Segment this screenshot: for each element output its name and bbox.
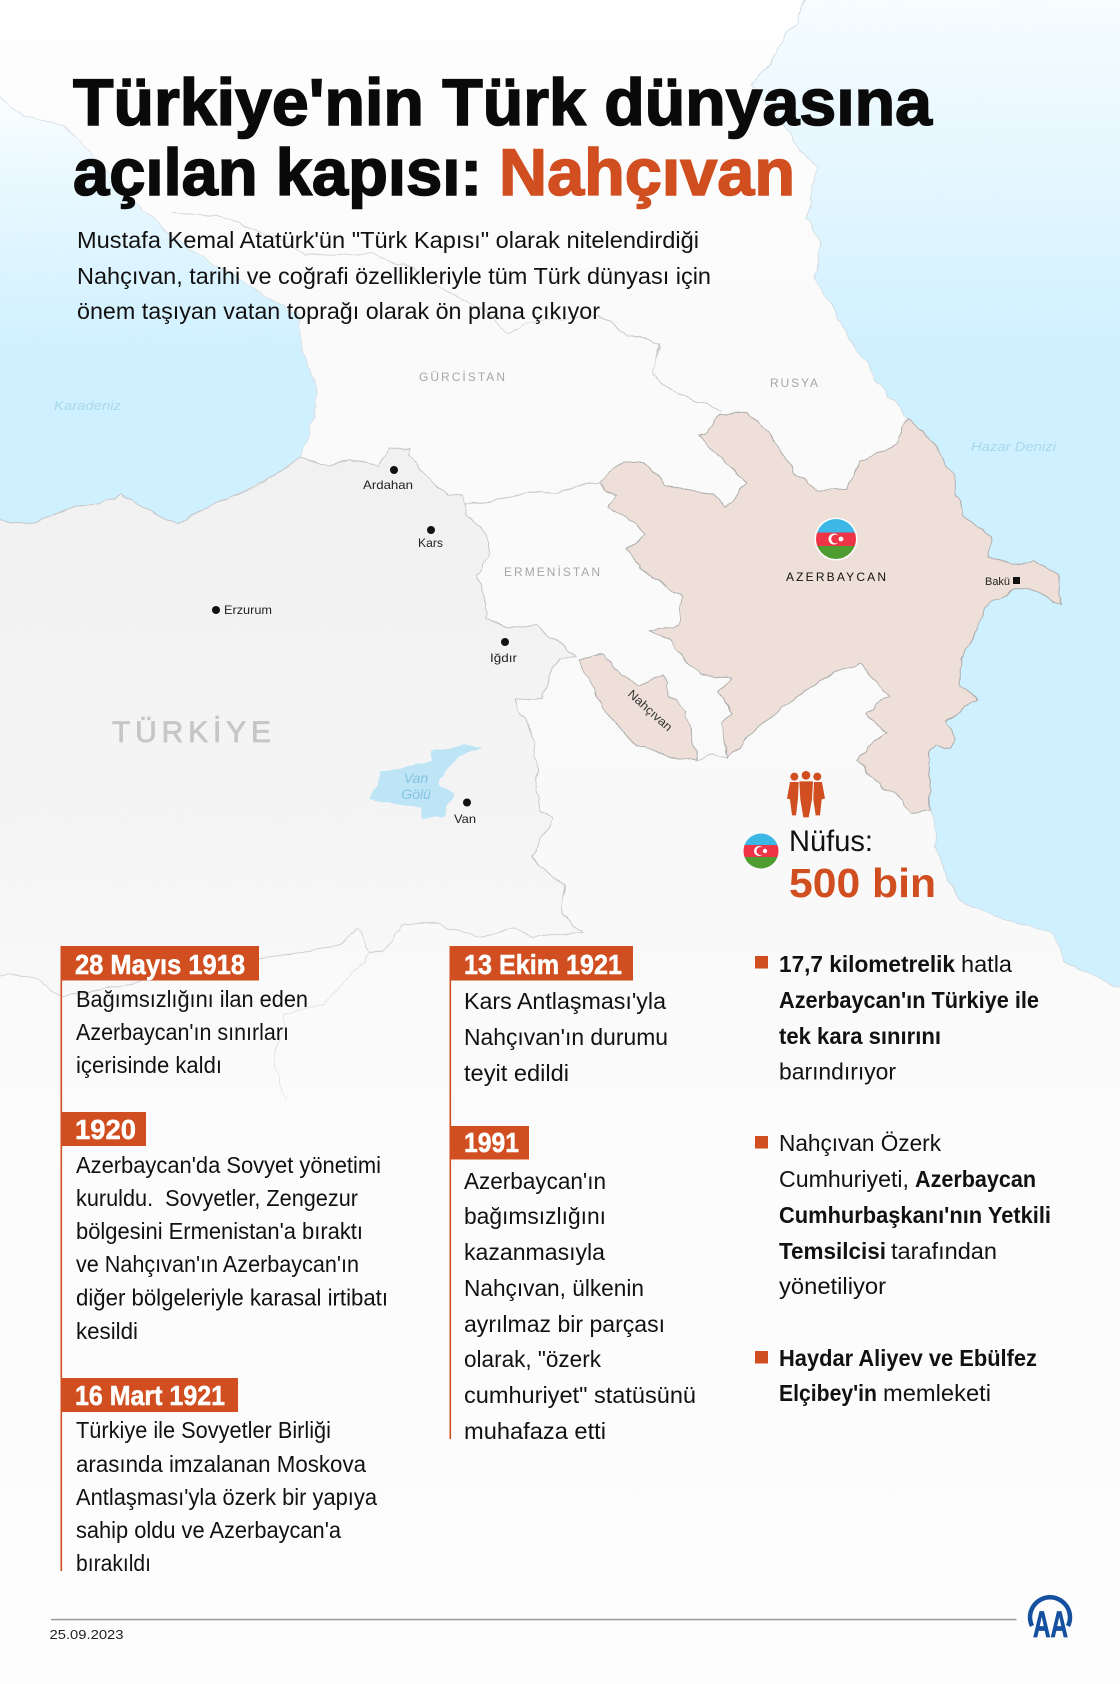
date: 13 Ekim 1921: 13 Ekim 1921 [464,949,622,980]
map of the Caucasus [0,0,1120,1100]
fact: administration: Nahçıvan Özerk [779,1130,941,1156]
timeline column 2 [450,946,696,1444]
map label: Van Gölü: Gölü [401,786,431,802]
population value: 500 bin [789,860,936,906]
borders [0,213,729,1100]
date: 1920 [61,1112,146,1146]
map label: Gürcistan: GÜRCİSTAN [419,370,505,384]
text: 16 Mart 1921 [76,1417,377,1576]
text: 1920: bölgesini Ermenistan'a bıraktı [76,1218,363,1244]
fact: administration: tarafından [891,1238,997,1264]
fact: administration: Temsilcisi [779,1238,886,1264]
country: Türkiye [0,448,582,997]
text: 1991: muhafaza etti [464,1418,606,1444]
subtitle: Nahçıvan, tarihi ve coğrafi özellikleriyle tüm Türk dünyası için [77,263,711,289]
fact: administration: Cumhurbaşkanı'nın Yetkili [779,1202,1051,1228]
fact: border: hatla [961,951,1012,977]
city: Kars: Kars [418,536,443,550]
title [73,65,933,209]
text: 1920: Azerbaycan'da Sovyet yönetimi [76,1152,381,1178]
fact: administration: yönetiliyor [779,1273,886,1299]
subtitle [77,227,711,324]
fact: leaders [755,1345,1037,1406]
region: Nahçıvan [577,654,696,761]
fact: leaders: Elçibey'in [779,1380,877,1406]
title: açılan kapısı: [73,135,482,209]
facts column [755,951,1051,1406]
text: 1991: ayrılmaz bir parçası [464,1311,665,1337]
fact: border: 17,7 kilometrelik [779,951,955,977]
date: 16 Mart 1921: 16 Mart 1921 [75,1380,225,1411]
text: 28 Mayıs 1918: içerisinde kaldı [76,1052,222,1078]
text: 1991: kazanmasıyla [464,1239,605,1265]
fact: border: barındırıyor [779,1058,896,1084]
text: 28 Mayıs 1918 [76,986,308,1078]
country: Azerbaycan [599,413,1062,813]
text: 1920: diğer bölgeleriyle karasal irtibatı [76,1284,388,1310]
text: 1920 [76,1152,388,1344]
date: 1991: 1991 [464,1127,519,1158]
text: 1991: Azerbaycan'ın [464,1168,606,1194]
subtitle: Mustafa Kemal Atatürk'ün "Türk Kapısı" olarak nitelendirdiği [77,227,699,253]
text: 1991: olarak, "özerk [464,1346,601,1372]
text: 16 Mart 1921: Türkiye ile Sovyetler Birliği [76,1417,331,1443]
map label: Ermenistan: ERMENİSTAN [504,565,600,579]
logo: AA [1030,1597,1070,1645]
city: Iğdır: Iğdır [490,651,517,665]
map label: Van Gölü: Van [404,770,428,786]
fact: administration: Cumhuriyeti, [779,1166,909,1192]
title: Türkiye'nin Türk dünyasına [73,65,933,139]
text: 28 Mayıs 1918: Azerbaycan'ın sınırları [76,1019,289,1045]
city: Van: Van [454,812,476,826]
fact: administration [755,1130,1051,1299]
date: 28 Mayıs 1918: 28 Mayıs 1918 [75,949,245,980]
title: Nahçıvan [499,135,795,209]
fact: border: Azerbaycan'ın Türkiye ile [779,987,1039,1013]
text: 13 Ekim 1921: Kars Antlaşması'yla [464,988,666,1014]
lake: Van Gölü [368,745,482,818]
border of Türkiye, north and east [0,448,582,933]
text: 16 Mart 1921: sahip oldu ve Azerbaycan'a [76,1517,341,1543]
date: 1920: 1920 [75,1114,136,1145]
date: 25.09.2023 [50,1627,124,1642]
text: 16 Mart 1921: Antlaşması'yla özerk bir yapıya [76,1484,377,1510]
text: 13 Ekim 1921: Nahçıvan'ın durumu [464,1024,668,1050]
city: Bakü: Bakü [985,576,1010,588]
text: 1920: kesildi [76,1318,138,1344]
city: Van [454,798,476,826]
timeline column 1 [60,946,388,1576]
text: 1991: Nahçıvan, ülkenin [464,1275,644,1301]
text: 28 Mayıs 1918: Bağımsızlığını ilan eden [76,986,308,1012]
fact: administration: Azerbaycan [915,1166,1036,1192]
text: 1991: cumhuriyet" statüsünü [464,1382,696,1408]
map label: Karadeniz: Karadeniz [54,398,122,413]
population label: Nüfus: [789,825,873,858]
fact: border: tek kara sınırını [779,1023,941,1049]
text: 1920: kuruldu. Sovyetler, Zengezur [76,1185,358,1211]
text: 16 Mart 1921: bırakıldı [76,1550,151,1576]
population block [743,771,936,906]
text: 13 Ekim 1921: teyit edildi [464,1060,569,1086]
map label: Türkiye: TÜRKİYE [112,716,271,749]
map label: Rusya: RUSYA [770,376,818,390]
sea: Karadeniz [0,75,318,525]
text: 1920: ve Nahçıvan'ın Azerbaycan'ın [76,1251,359,1277]
icon: small flag [743,833,779,869]
city: Kars [418,526,443,550]
fact: leaders: memleketi [883,1380,991,1406]
fact: border [755,951,1039,1084]
fact: leaders: Haydar Aliyev ve Ebülfez [779,1345,1037,1371]
map label: Hazar Denizi: Hazar Denizi [971,439,1057,454]
city: Ardahan: Ardahan [363,478,413,492]
footer rule [51,1619,1016,1620]
icon: Azerbaijan flag [814,518,858,560]
sea: Hazar Denizi [750,0,1120,1000]
subtitle: önem taşıyan vatan toprağı olarak ön plana çıkıyor [77,298,600,324]
map label: Van Gölü [401,770,431,802]
city: Erzurum: Erzurum [224,603,272,617]
text: 1991 [464,1168,696,1444]
city: Ardahan [363,466,413,492]
text: 16 Mart 1921: arasında imzalanan Moskova [76,1451,366,1477]
text: 13 Ekim 1921 [464,988,668,1086]
logo: AA: AA [1033,1604,1068,1645]
map label: Azerbaycan: AZERBAYCAN [786,570,886,584]
map label: Nahçıvan: Nahçıvan [625,687,675,734]
icon: people [787,771,825,817]
city: Iğdır [490,638,517,665]
text: 1991: bağımsızlığını [464,1203,606,1229]
